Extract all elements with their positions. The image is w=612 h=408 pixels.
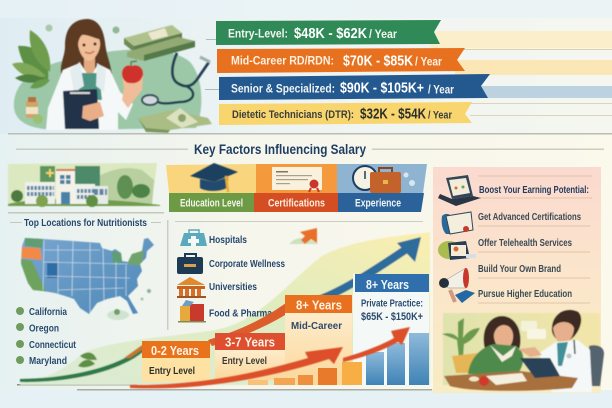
location: oregon <box>16 322 59 334</box>
step: 3-7 years: Entry Level <box>222 355 267 367</box>
location: connecticut <box>16 339 76 351</box>
card: education level: Education Level <box>180 198 243 210</box>
panel: top locations <box>8 212 164 367</box>
icon: leaves <box>12 24 120 89</box>
sector: hospitals: Hospitals <box>209 234 247 246</box>
icon: top cash stacks <box>124 25 195 61</box>
career progression chart <box>130 274 429 388</box>
banner: entry-level <box>216 20 441 45</box>
map: united states <box>20 237 154 320</box>
tip: build your own brand: Build Your Own Brand <box>478 264 561 275</box>
banner: entry-level: Entry-Level: <box>228 26 288 40</box>
banner: dietetic technicians: $32K - $54K <box>360 106 426 122</box>
step: 0-2 years <box>142 341 210 382</box>
banner: mid-career: Mid-Career RD/RDN: <box>231 54 334 68</box>
woman in lab coat <box>46 19 143 130</box>
tablet and chart paper <box>469 358 560 386</box>
icon: certificate tablet <box>442 212 473 234</box>
woman client <box>468 316 523 374</box>
sector: food and pharma: Food & Pharma <box>209 308 272 320</box>
banner: senior and specialized <box>219 74 490 100</box>
step: 8+ years mid-career: 8+ Years <box>296 298 342 312</box>
ribbon: orange swoosh between steps <box>208 303 290 346</box>
icon: small orange arrow <box>289 228 319 244</box>
sector: universities <box>177 277 257 298</box>
chair <box>589 345 604 386</box>
step: 8+ years private practice: 8+ Years <box>366 277 409 292</box>
arrow: red career arrow <box>130 327 410 388</box>
career growth sweep background <box>20 228 430 385</box>
location: california: California <box>29 306 67 318</box>
speech bubbles <box>521 321 546 339</box>
sector: hospitals <box>180 230 247 246</box>
step: 8+ years mid-career <box>285 295 352 385</box>
icon: telehealth tablet <box>438 241 476 260</box>
heading: key factors: Key Factors Influencing Salary <box>194 141 366 157</box>
sector: universities: Universities <box>209 281 257 293</box>
banner: dietetic technicians: / Year <box>428 110 453 122</box>
banner: entry-level: / Year <box>369 29 397 41</box>
swoosh: dark green and orange ribbon <box>20 345 143 382</box>
factor cards <box>166 163 427 212</box>
hero illustration: dietitian with money and stethoscope <box>12 19 212 133</box>
heading: top locations: Top Locations for Nutritionists <box>24 217 147 229</box>
step: 8+ years mid-career: Mid-Career <box>291 320 342 332</box>
banner: mid-career <box>217 48 465 73</box>
panel: employment sectors <box>175 221 423 322</box>
divider: locations and sectors <box>167 220 168 330</box>
card: education level <box>166 163 256 212</box>
salary stripes behind banners <box>205 31 612 116</box>
step: 8+ years private practice: $65K - $150K+ <box>361 311 423 323</box>
location: oregon: Oregon <box>29 322 59 334</box>
sector: corporate wellness <box>177 254 285 274</box>
banner: mid-career: $70K - $85K <box>343 52 413 70</box>
icon: small graduation cap <box>455 290 475 303</box>
icon: bottom cash <box>138 108 212 133</box>
consultation scene <box>442 310 604 392</box>
icon: supplement bottle <box>26 97 43 124</box>
icon: potted plant <box>442 318 480 373</box>
panel: boost earning potential <box>433 167 604 393</box>
banner: entry-level: $48K - $62K <box>294 25 367 42</box>
icon: certificate <box>272 167 322 192</box>
green blob backdrop <box>14 50 201 130</box>
banner: senior and specialized: $90K - $105K+ <box>340 80 424 96</box>
banner: mid-career: / Year <box>415 56 442 68</box>
tip: higher education: Pursue Higher Education <box>478 289 572 300</box>
tip: certifications: Get Advanced Certifications <box>478 212 581 223</box>
arrow: blue growth <box>318 237 421 300</box>
salary banners <box>216 20 490 125</box>
table <box>444 371 578 391</box>
card: certifications: Certifications <box>268 198 325 210</box>
banner: senior and specialized: / Year <box>428 84 454 96</box>
banner: dietetic technicians <box>219 102 472 125</box>
icon: apple <box>122 61 143 83</box>
icon: clock and briefcase <box>353 166 415 193</box>
step: 3-7 years <box>215 333 285 380</box>
hospital landscape scene <box>8 163 160 207</box>
banner: senior and specialized: Senior & Specialized: <box>231 82 335 96</box>
card: experience <box>337 164 427 212</box>
step: 0-2 years: 0-2 Years <box>151 343 199 358</box>
step: 8+ years private practice <box>353 274 429 386</box>
icon: stethoscope <box>142 53 210 105</box>
card: experience: Experience <box>355 198 401 210</box>
sector: corporate wellness: Corporate Wellness <box>209 258 285 270</box>
card: certifications <box>254 164 338 212</box>
location: maryland: Maryland <box>29 355 67 367</box>
banner: dietetic technicians: Dietetic Technicians (DTR): <box>232 109 354 121</box>
step: 8+ years private practice: Private Practice: <box>361 298 423 310</box>
location: maryland <box>16 355 67 367</box>
icon: graduation cap <box>190 163 238 192</box>
bars: orange salary bars <box>248 362 362 385</box>
sector: food and pharma <box>178 300 272 322</box>
location: california <box>16 306 67 318</box>
location: connecticut: Connecticut <box>29 339 76 351</box>
icon: megaphone <box>439 268 469 302</box>
step: 0-2 years: Entry Level <box>149 365 195 377</box>
icon: laptop <box>438 175 481 206</box>
tip: telehealth: Offer Telehealth Services <box>478 238 572 249</box>
step: 3-7 years: 3-7 Years <box>225 334 275 350</box>
doctor <box>518 310 592 392</box>
